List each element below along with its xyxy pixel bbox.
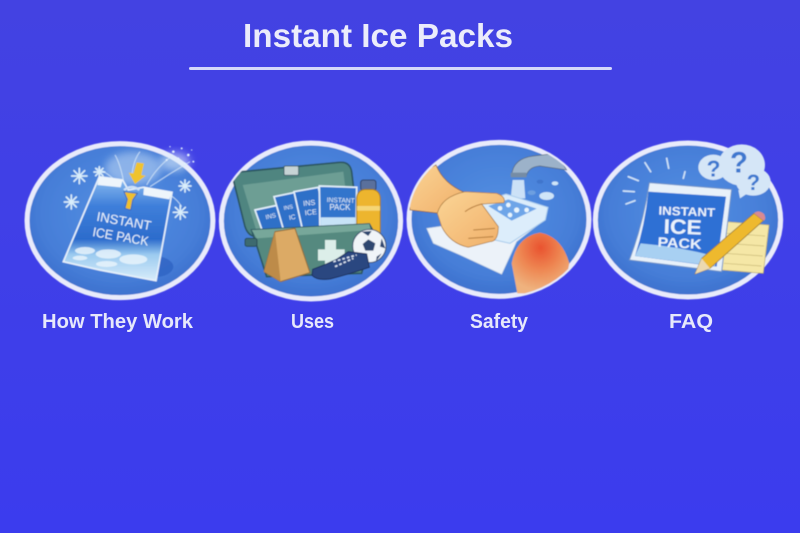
- label: how they work: How They Work: [42, 311, 194, 333]
- panel: uses: [221, 143, 401, 299]
- title underline: [189, 67, 612, 70]
- icon: ice pack: ICE: [663, 215, 702, 240]
- icon: notepad: [722, 222, 769, 273]
- icon: kit base: [252, 224, 373, 277]
- label: safety: Safety: [470, 311, 529, 333]
- icon: packets: INS: [283, 204, 294, 212]
- icon: arm: [407, 165, 465, 215]
- icon: packets: INS: [265, 212, 277, 221]
- disc: [27, 144, 213, 298]
- icon: ice pack: PACK: [657, 235, 702, 252]
- icon: paper bag: [264, 228, 310, 282]
- label: faq: FAQ: [669, 311, 713, 333]
- title: Instant Ice Packs: [243, 17, 513, 54]
- sparkle lines: [623, 158, 685, 204]
- icon: snowflakes: [64, 167, 191, 219]
- icon: packets: IC: [288, 214, 296, 222]
- icon: kit lid: [233, 162, 358, 237]
- icon: ice pack: INSTANT: [95, 209, 153, 233]
- icon: cross: [318, 240, 345, 270]
- icon: packets: ICE: [304, 207, 317, 217]
- icon: yellow arrow and clip: [124, 162, 146, 210]
- icon: pencil: [695, 211, 765, 274]
- icon: packets: INSTANT: [327, 197, 355, 205]
- label: uses: Uses: [291, 311, 334, 333]
- disc: [409, 142, 589, 296]
- icon: packets: PACK: [329, 203, 351, 212]
- panel: faq: [595, 143, 781, 297]
- icon: faucet: [512, 153, 567, 177]
- icon: question bubbles: [698, 144, 771, 198]
- icon: question bubbles: ?: [707, 156, 721, 182]
- icon: ice pack: ICE PACK: [91, 224, 150, 249]
- icon: ice block: [477, 194, 548, 243]
- icon: question bubbles: ?: [747, 170, 760, 195]
- shadow: [133, 256, 173, 277]
- icon: soccer ball: [353, 229, 386, 263]
- water stream: [511, 180, 525, 198]
- icon: ice pack: [63, 177, 172, 281]
- icon: ice pack: [629, 183, 732, 272]
- icon: knee: [512, 233, 569, 293]
- icon: packets: INS: [303, 198, 316, 208]
- icon: faucet nozzle: [511, 173, 527, 177]
- icon: kit latch: [284, 166, 299, 175]
- icon: hand: [437, 192, 504, 247]
- panel: safety: [407, 142, 589, 296]
- icon: burst spray: [97, 146, 194, 207]
- icon: ice pack: INSTANT: [658, 204, 716, 220]
- disc: [221, 143, 401, 299]
- icon: question bubbles: ?: [730, 147, 748, 180]
- icon: packets: [253, 184, 358, 230]
- icon: bottle: [357, 180, 380, 235]
- disc: [595, 143, 781, 297]
- splash: [528, 180, 558, 200]
- icon: towel: [427, 220, 540, 274]
- icon: shoe: [312, 252, 369, 279]
- panel: how they work: [27, 144, 213, 298]
